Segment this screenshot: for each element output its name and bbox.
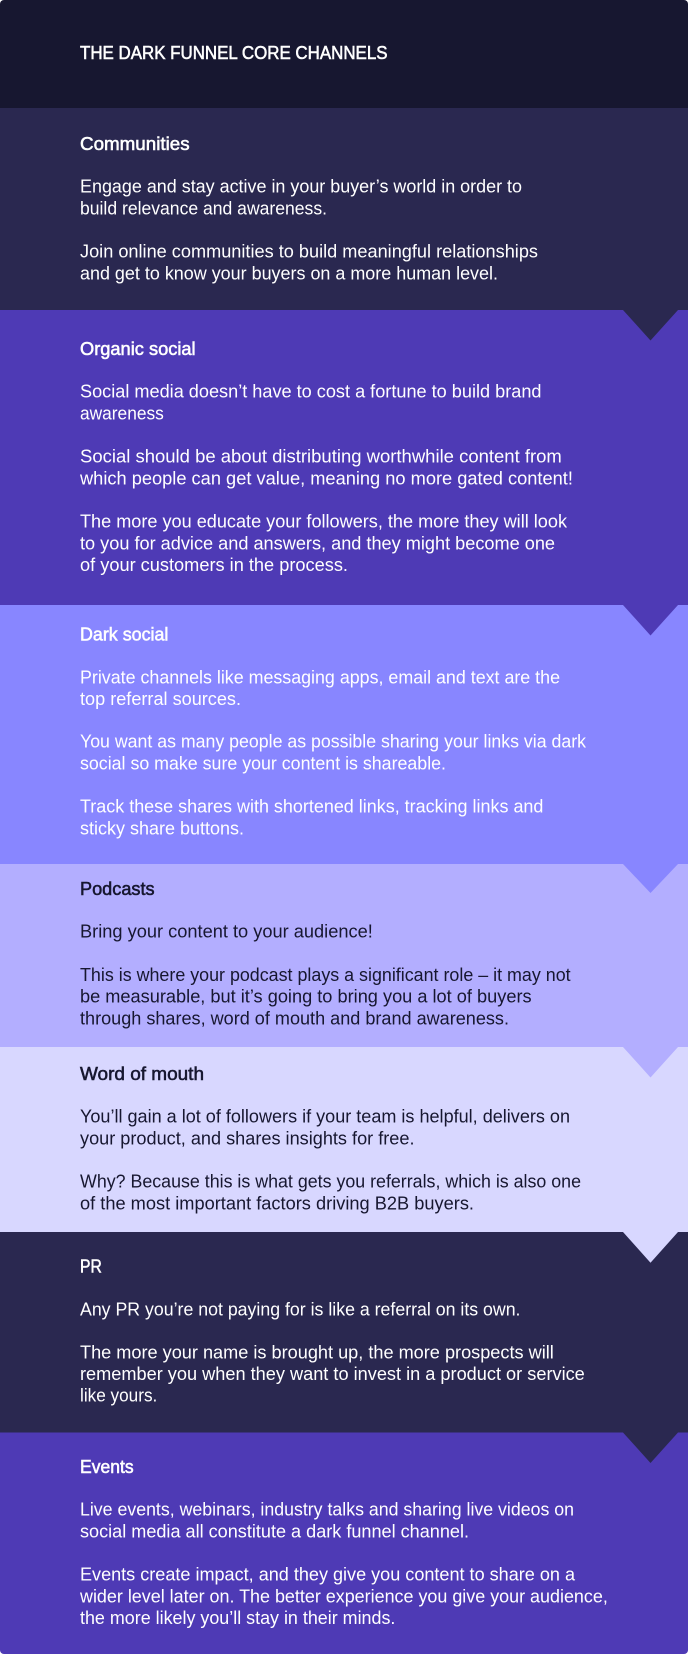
- text block: PR paragraph 2: The more your name is brought up, the more prospects will: [80, 1343, 554, 1363]
- text block: podcasts paragraph 1: Bring your content to your audience!: [80, 922, 373, 942]
- panel: podcasts: [0, 864, 688, 1047]
- text block: events paragraph 2: wider level later on. The better experience you give your audience,: [79, 1586, 608, 1606]
- text block: events paragraph 2: the more likely you’ll stay in their minds.: [80, 1608, 395, 1628]
- text block: word of mouth paragraph 2: Why? Because this is what gets you referrals, which is also one: [80, 1172, 581, 1192]
- text block: communities paragraph 2: and get to know your buyers on a more human level.: [80, 263, 498, 283]
- panel: events: [0, 1432, 688, 1654]
- panel: communities: [0, 108, 688, 310]
- text block: dark social paragraph 2: [80, 732, 587, 773]
- arrow: dark social to podcasts: [623, 864, 678, 893]
- heading: dark social: Dark social: [80, 625, 168, 645]
- panel: dark social: [0, 605, 688, 864]
- text block: dark social paragraph 3: sticky share buttons.: [80, 818, 244, 838]
- text block: PR paragraph 1: Any PR you’re not paying for is like a referral on its own.: [80, 1299, 520, 1319]
- panel: title header: [0, 0, 688, 108]
- text block: communities paragraph 1: build relevance and awareness.: [80, 198, 327, 218]
- arrow: communities to organic social: [623, 310, 678, 340]
- text block: dark social paragraph 3: [80, 797, 543, 838]
- panel: word of mouth: [0, 1047, 688, 1232]
- text block: dark social paragraph 2: social so make sure your content is shareable.: [80, 753, 446, 773]
- panel: PR: [0, 1232, 688, 1432]
- heading: word of mouth: Word of mouth: [80, 1064, 204, 1084]
- heading: PR: PR: [80, 1256, 102, 1276]
- text block: events paragraph 2: [79, 1565, 608, 1628]
- heading: podcasts: Podcasts: [80, 879, 155, 899]
- text block: organic social paragraph 2: [79, 447, 573, 488]
- text block: PR paragraph 2: remember you when they want to invest in a product or service: [80, 1364, 585, 1384]
- title: THE DARK FUNNEL CORE CHANNELS: [80, 43, 388, 63]
- text block: dark social paragraph 1: [80, 667, 560, 709]
- text block: organic social paragraph 3: The more you educate your followers, the more they will look: [80, 511, 568, 531]
- text block: PR paragraph 2: like yours.: [80, 1386, 157, 1406]
- text block: dark social paragraph 3: Track these shares with shortened links, tracking links and: [80, 797, 543, 817]
- arrow: podcasts to word of mouth: [623, 1047, 678, 1078]
- text block: word of mouth paragraph 1: your product, and shares insights for free.: [80, 1128, 414, 1148]
- text block: organic social paragraph 3: of your customers in the process.: [80, 555, 348, 575]
- text block: organic social paragraph 3: [80, 511, 568, 575]
- arrow: word of mouth to PR: [623, 1232, 678, 1263]
- text block: podcasts paragraph 2: This is where your podcast plays a significant role – it may not: [80, 965, 571, 985]
- text block: podcasts paragraph 2: through shares, word of mouth and brand awareness.: [80, 1008, 509, 1028]
- heading: events: Events: [80, 1457, 134, 1477]
- text block: events paragraph 1: Live events, webinars, industry talks and sharing live videos on: [80, 1500, 574, 1520]
- arrow: organic social to dark social: [623, 605, 678, 636]
- heading: communities: Communities: [80, 134, 190, 154]
- text block: podcasts paragraph 2: be measurable, but it’s going to bring you a lot of buyers: [80, 987, 532, 1007]
- text block: communities paragraph 2: [80, 242, 538, 283]
- text block: events paragraph 1: [80, 1502, 573, 1538]
- text block: communities paragraph 1: Engage and stay active in your buyer’s world in order to: [80, 177, 522, 197]
- text block: communities paragraph 1: [81, 179, 522, 214]
- text block: organic social paragraph 3: to you for advice and answers, and they might become one: [80, 533, 555, 553]
- text block: dark social paragraph 2: You want as many people as possible sharing your links via dark: [80, 732, 587, 752]
- text block: word of mouth paragraph 1: You’ll gain a lot of followers if your team is helpful, delivers on: [80, 1107, 570, 1127]
- heading: organic social: Organic social: [80, 339, 196, 359]
- text block: podcasts paragraph 2: [80, 965, 571, 1028]
- text block: PR paragraph 2: [80, 1343, 585, 1406]
- text block: word of mouth paragraph 1: [80, 1107, 570, 1148]
- text block: organic social paragraph 2: which people can get value, meaning no more gated content!: [79, 468, 573, 488]
- text block: word of mouth paragraph 2: [80, 1172, 581, 1213]
- text block: organic social paragraph 2: Social should be about distributing worthwhile content from: [80, 447, 562, 467]
- text block: organic social paragraph 1: Social media doesn’t have to cost a fortune to build brand: [80, 382, 542, 402]
- text block: organic social paragraph 1: [80, 384, 540, 420]
- arrow: PR to events: [623, 1432, 678, 1463]
- text block: dark social paragraph 1: Private channels like messaging apps, email and text are the: [80, 667, 560, 687]
- text block: organic social paragraph 1: awareness: [80, 403, 164, 423]
- text block: communities paragraph 2: Join online communities to build meaningful relationships: [80, 242, 538, 262]
- text block: dark social paragraph 1: top referral sources.: [80, 689, 241, 709]
- text block: word of mouth paragraph 2: of the most important factors driving B2B buyers.: [80, 1193, 474, 1213]
- panel: organic social: [0, 310, 688, 605]
- text block: events paragraph 1: social media all constitute a dark funnel channel.: [80, 1521, 469, 1541]
- text block: events paragraph 2: Events create impact, and they give you content to share on a: [80, 1565, 576, 1585]
